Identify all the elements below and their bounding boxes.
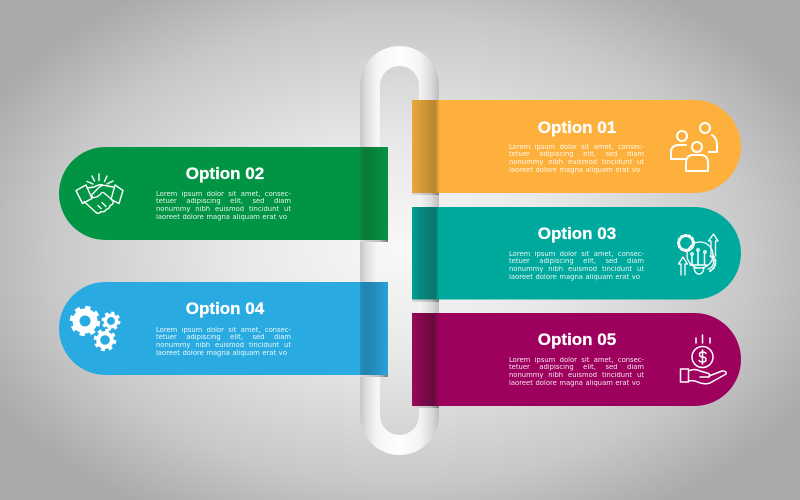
icon: people [670, 122, 718, 172]
text block [156, 190, 291, 221]
icon: handshake [75, 173, 124, 214]
text block [509, 144, 644, 174]
heading: Option 03 [538, 224, 616, 242]
panel: option 02 [59, 147, 388, 242]
heading: Option 05 [538, 330, 616, 349]
panel: option 03 [412, 207, 741, 302]
heading: Option 01 [538, 118, 616, 136]
text block [509, 250, 644, 281]
panel: option 04 [59, 282, 388, 377]
heading: Option 04 [186, 298, 264, 318]
heading: Option 02 [186, 164, 264, 182]
text block [156, 326, 291, 357]
panel: option 05 [412, 313, 741, 408]
icon: growth chart and gears [677, 233, 719, 276]
icon: hand with coin [680, 334, 727, 384]
text block [509, 356, 644, 387]
icon: gears [70, 306, 120, 352]
panel: option 01 [412, 100, 741, 195]
